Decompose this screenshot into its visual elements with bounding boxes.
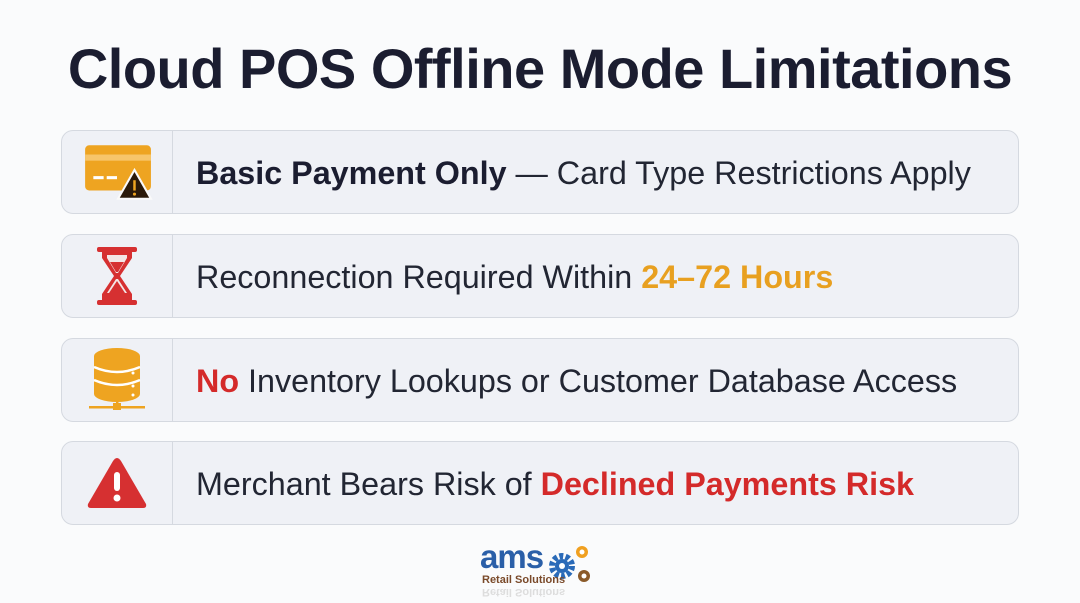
- logo: Retail Solutions: [482, 586, 565, 598]
- icon: card warning: [62, 131, 173, 213]
- panel: merchant risk: [61, 441, 1019, 525]
- icon: warning: [62, 442, 173, 524]
- title: Cloud POS Offline Mode Limitations: [68, 37, 1012, 100]
- text: Merchant Bears Risk of Declined Payments Risk: [196, 466, 914, 502]
- panel: basic payment: [61, 130, 1019, 214]
- panel: no inventory: [61, 338, 1019, 422]
- icon: database: [62, 339, 173, 421]
- text: Basic Payment Only — Card Type Restrictions Apply: [196, 155, 971, 191]
- text: No Inventory Lookups or Customer Database Access: [196, 363, 957, 399]
- text: Reconnection Required Within 24–72 Hours: [196, 259, 833, 295]
- panel: reconnection: [61, 234, 1019, 318]
- icon: hourglass: [62, 235, 173, 317]
- logo: [480, 538, 590, 598]
- logo: Retail Solutions: [482, 574, 565, 586]
- logo: ams: [480, 538, 543, 575]
